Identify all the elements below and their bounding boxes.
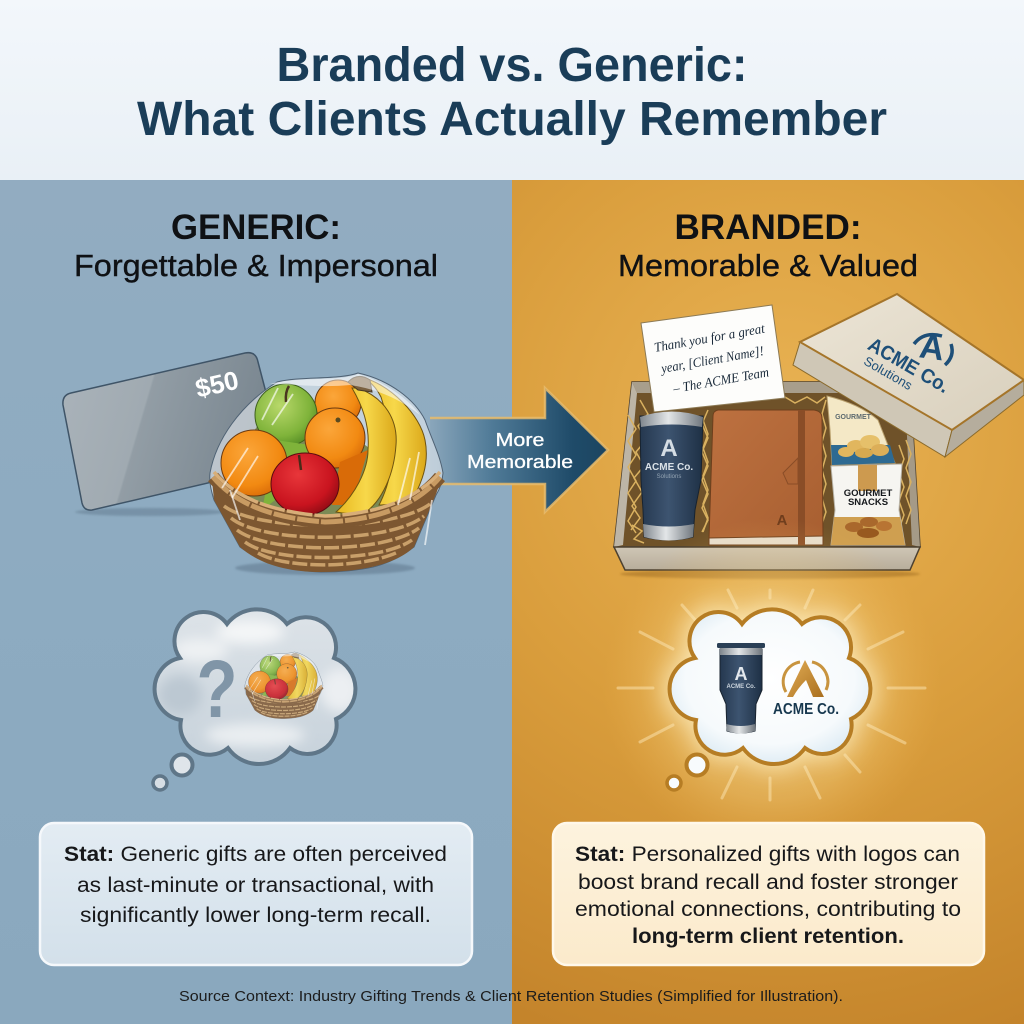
panel: branded background — [512, 180, 1024, 1024]
notebook: A — [777, 512, 788, 529]
tumbler: Solutions — [657, 474, 681, 480]
arrow: more memorable: Memorable — [467, 451, 573, 472]
lid — [793, 294, 1024, 457]
note card: Thank you for a great — [653, 321, 767, 355]
note card — [641, 305, 785, 412]
stat box: generic: significantly lower long-term recall. — [80, 903, 431, 927]
title — [137, 39, 887, 146]
thought bubble small — [153, 776, 167, 790]
question mark: ? — [196, 644, 238, 735]
sun rays — [618, 590, 925, 800]
tumbler: A — [660, 435, 678, 462]
note card: year, [Client Name]! — [658, 343, 765, 376]
panel: generic background — [0, 180, 512, 1024]
box shadow — [620, 569, 920, 579]
thought bubble large — [686, 754, 708, 776]
stat box: generic: Stat: Generic gifts are often perceived — [64, 842, 447, 866]
cloud glow — [602, 518, 942, 858]
title: What Clients Actually Remember — [137, 93, 887, 146]
arrow: more memorable: More — [496, 429, 544, 450]
stat box: generic: as last-minute or transactional, with — [77, 873, 434, 897]
notebook — [709, 410, 823, 545]
tumbler in cloud — [717, 643, 765, 734]
tumbler in cloud: ACME Co. — [726, 684, 756, 690]
acme logo — [773, 660, 839, 718]
tumbler in cloud: A — [734, 664, 748, 684]
branded heading — [618, 208, 918, 283]
generic heading: GENERIC: — [171, 208, 341, 247]
box front — [614, 547, 920, 570]
title: Branded vs. Generic: — [276, 39, 748, 92]
gift card: $50 — [192, 365, 241, 404]
branded heading: BRANDED: — [674, 208, 862, 247]
stat box: branded: boost brand recall and foster stronger — [578, 870, 958, 894]
lid: Solutions — [861, 353, 915, 393]
lid: A — [917, 327, 947, 369]
gourmet snacks bag — [831, 464, 905, 545]
source line: Source Context: Industry Gifting Trends & Client Retention Studies (Simplified for Illustration). — [179, 989, 843, 1005]
acme logo: ACME Co. — [773, 701, 839, 718]
generic heading: Forgettable & Impersonal — [74, 248, 438, 283]
gift card — [63, 353, 285, 516]
fruit basket wrapped in cellophane — [210, 373, 443, 575]
shredded paper — [628, 397, 911, 543]
thought bubble large — [172, 754, 192, 776]
stat box: branded — [553, 823, 984, 965]
box inside — [614, 382, 920, 547]
lid: ACME Co. — [864, 334, 953, 398]
note card: – The ACME Team — [671, 364, 770, 396]
stat box: branded: long-term client retention. — [632, 924, 904, 948]
tumbler — [640, 412, 703, 540]
branded heading: Memorable & Valued — [618, 248, 918, 283]
gift box — [614, 294, 1024, 579]
arrow: more memorable — [430, 388, 608, 512]
generic heading — [74, 208, 438, 283]
chips bag: GOURMET — [835, 414, 872, 421]
chips bag — [827, 396, 895, 465]
stat box: branded: emotional connections, contributing to — [575, 897, 961, 921]
header band — [0, 0, 1024, 180]
thought bubble small — [667, 776, 681, 790]
stat box: branded: Stat: Personalized gifts with logos can — [575, 842, 960, 866]
thought cloud: branded — [602, 518, 942, 858]
gourmet snacks bag: GOURMET — [844, 488, 892, 499]
gourmet snacks bag: SNACKS — [848, 497, 888, 508]
faded fruit basket — [245, 652, 323, 719]
thought cloud: generic — [153, 609, 360, 790]
tumbler: ACME Co. — [645, 462, 693, 473]
stat box: generic — [40, 823, 472, 965]
